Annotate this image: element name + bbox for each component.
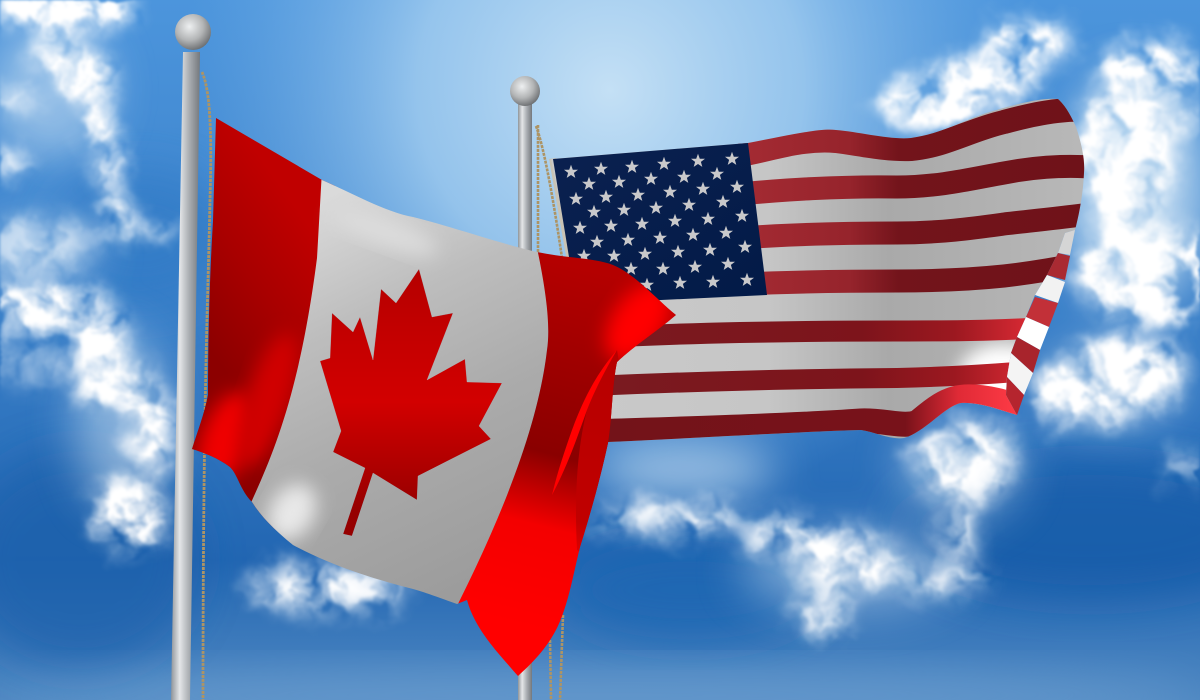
clouds: lower right bbox=[913, 323, 1200, 562]
bright fold sliver bbox=[552, 350, 617, 495]
folded fly end bbox=[1006, 230, 1075, 415]
clouds: lower centre bbox=[590, 503, 990, 634]
left halyard ropes bbox=[202, 72, 211, 700]
flap back fold bbox=[576, 350, 618, 552]
left flagpole bbox=[171, 14, 211, 700]
clouds: top left bbox=[0, 0, 180, 273]
left red band bbox=[185, 110, 335, 530]
maple leaf bbox=[320, 269, 502, 536]
flag: United States bbox=[540, 90, 1100, 450]
flag: Canada bbox=[185, 110, 690, 690]
white centre band bbox=[252, 180, 548, 604]
right halyard ropes bbox=[536, 125, 563, 700]
clouds: lower left faint bbox=[250, 564, 410, 612]
stripes bbox=[540, 90, 1100, 450]
right red band bbox=[458, 252, 676, 676]
clouds: left middle bbox=[0, 283, 185, 551]
right flagpole bbox=[510, 76, 540, 700]
hoist strip bbox=[549, 158, 576, 262]
flap highlight bbox=[594, 278, 676, 364]
canton with stars bbox=[553, 143, 767, 305]
clouds: top right bbox=[871, 20, 1200, 322]
